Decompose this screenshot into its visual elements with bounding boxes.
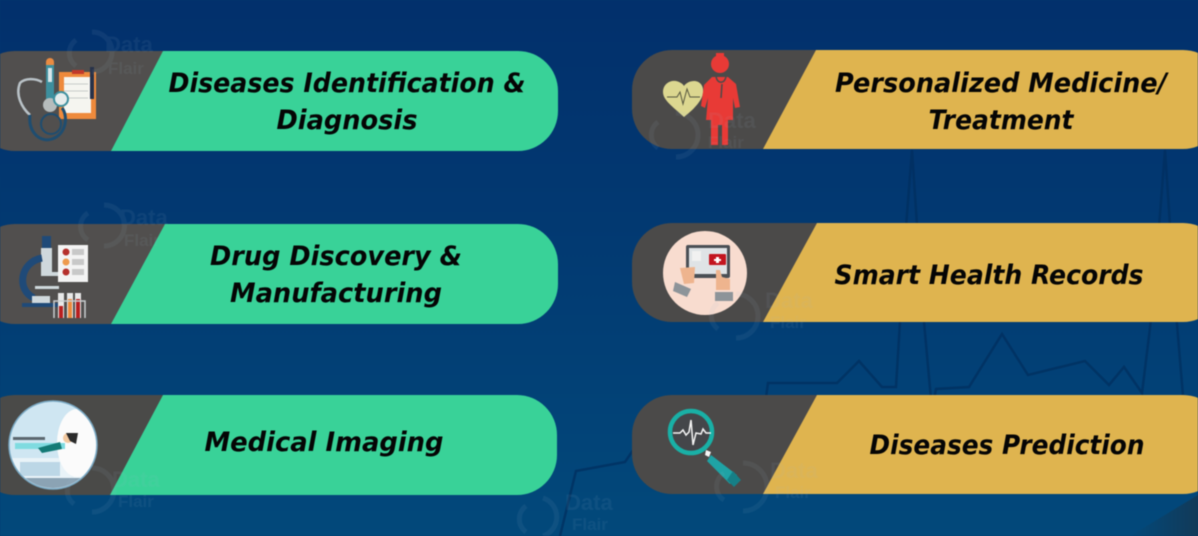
label: drug discovery	[210, 241, 462, 309]
watermarks: DataFlair: Flair	[770, 313, 806, 332]
watermarks: DataFlair: Data	[770, 458, 818, 483]
watermarks: DataFlair: Flair	[572, 515, 608, 534]
label: diseases identification	[168, 68, 526, 136]
label: personalized medicine	[835, 68, 1169, 136]
panel: smart health records	[632, 223, 1198, 322]
icon: MRI scanner	[9, 401, 99, 490]
panel: personalized medicine	[632, 50, 1198, 149]
label: smart health records: Smart Health Records	[834, 260, 1144, 291]
panel: medical imaging	[0, 395, 557, 495]
icon: microscope and test tubes	[22, 236, 88, 318]
label: medical imaging: Medical Imaging	[204, 427, 444, 458]
watermarks: DataFlair	[67, 32, 818, 536]
label: drug discovery: Manufacturing	[230, 278, 442, 309]
icon: magnifier with pulse	[670, 411, 741, 487]
watermarks: DataFlair: Flair	[118, 492, 154, 511]
watermarks: DataFlair: Flair	[108, 59, 144, 78]
watermarks: DataFlair: Data	[565, 490, 613, 515]
label: personalized medicine: Treatment	[928, 105, 1075, 136]
watermarks: DataFlair: Flair	[708, 133, 744, 152]
background ECG line	[560, 150, 1198, 536]
watermarks: DataFlair: Data	[112, 467, 160, 492]
icon: heart and nurse	[663, 53, 740, 145]
panel: drug discovery	[0, 224, 558, 324]
watermarks: DataFlair: Data	[765, 288, 813, 313]
icon: stethoscope and clipboard	[18, 58, 96, 140]
label: diseases identification: Diseases Identification &	[168, 68, 526, 99]
panel: diseases identification	[0, 51, 558, 151]
label: personalized medicine: Personalized Medicine/	[835, 68, 1169, 99]
label: drug discovery: Drug Discovery &	[210, 241, 462, 272]
watermarks: DataFlair: Data	[120, 205, 168, 230]
label: diseases prediction: Diseases Prediction	[870, 430, 1144, 461]
watermarks: DataFlair: Flair	[775, 483, 811, 502]
watermarks: DataFlair: Flair	[124, 231, 160, 250]
label: diseases identification: Diagnosis	[276, 105, 418, 136]
icon: tablet in hands	[663, 231, 747, 315]
panel: diseases prediction	[632, 395, 1198, 494]
watermarks: DataFlair: Data	[105, 32, 153, 57]
watermarks: DataFlair: Data	[708, 108, 756, 133]
